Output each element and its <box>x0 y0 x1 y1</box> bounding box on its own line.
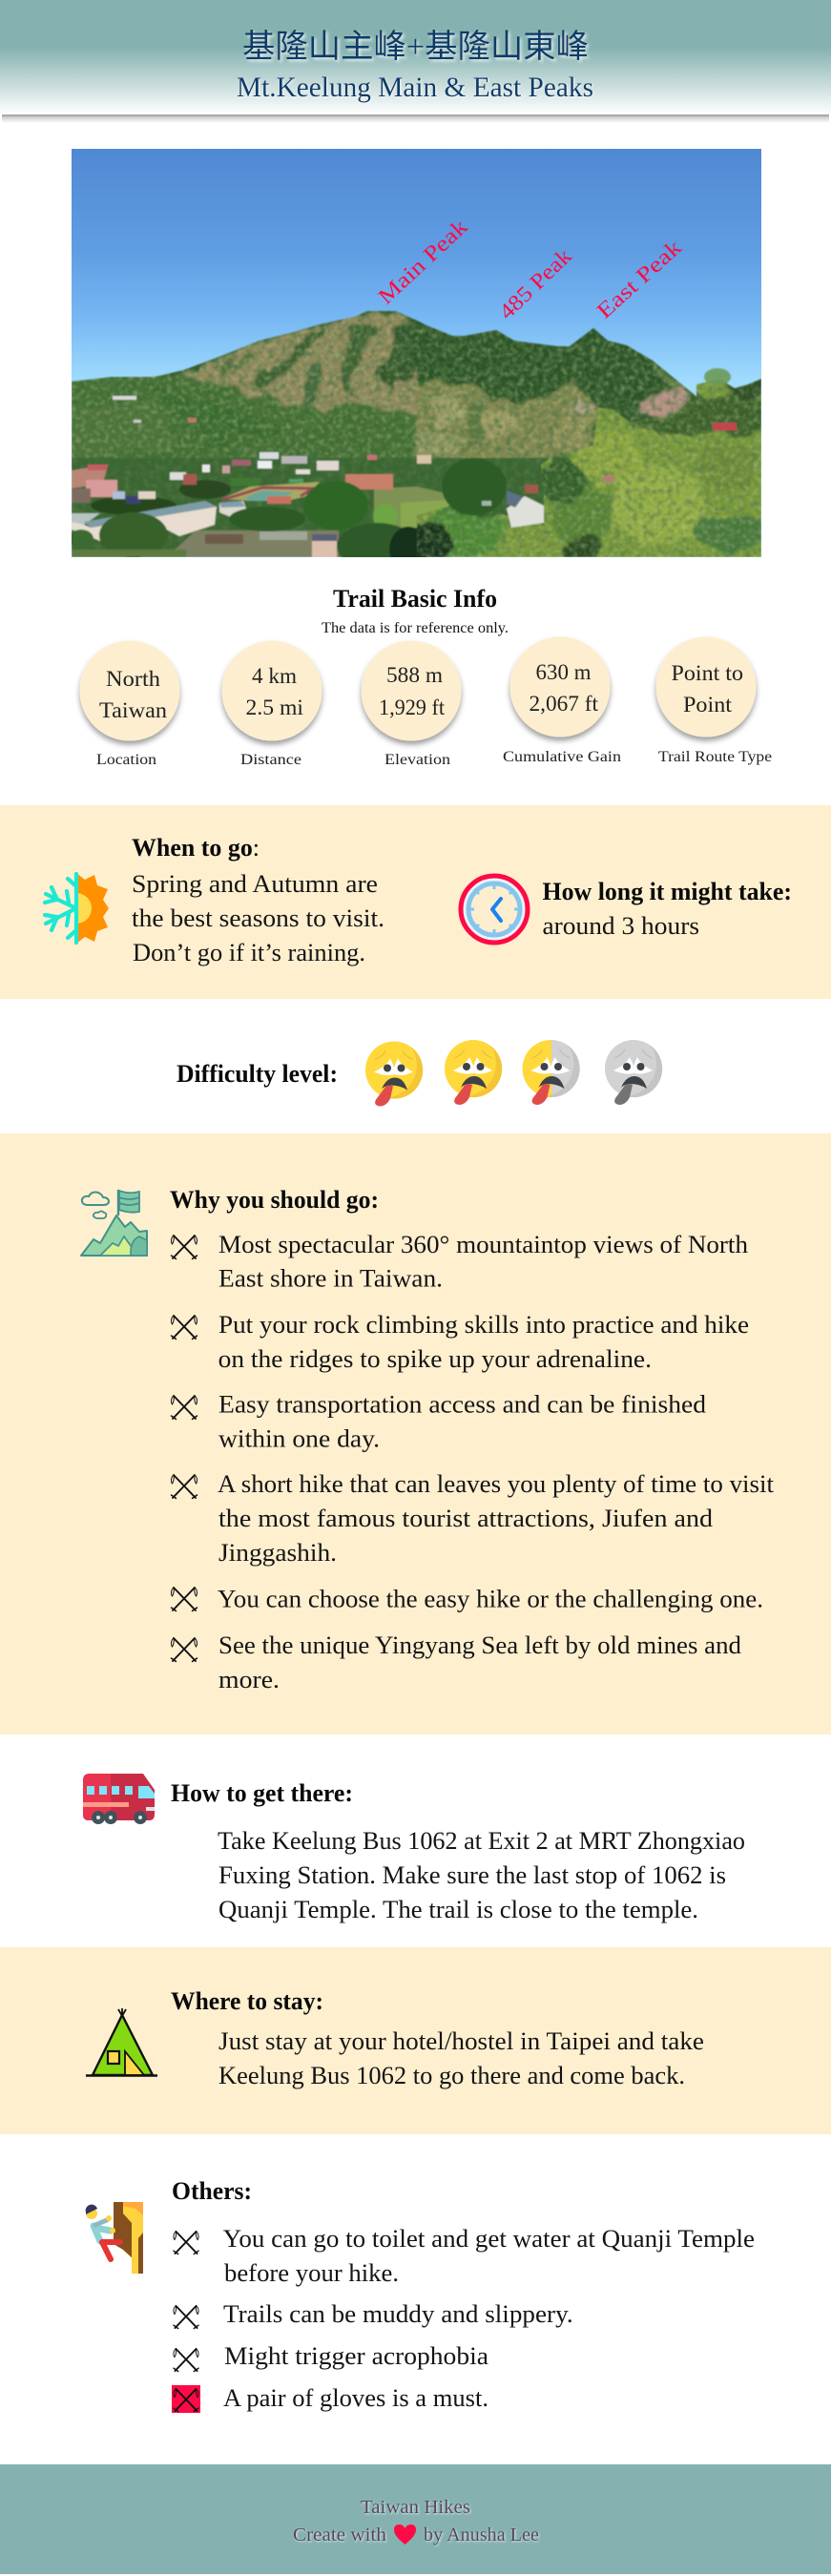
stat: elevation: 588 m <box>386 663 443 687</box>
dark tree behind house <box>442 458 507 515</box>
grass <box>374 487 458 528</box>
reason 4: Jinggashih. <box>218 1539 337 1567</box>
reason 6: more. <box>218 1666 280 1693</box>
text: bus directions: Fuxing Station. Make sure the last stop of 1062 is <box>218 1861 726 1889</box>
heading: how to get there: How to get there: <box>171 1779 353 1807</box>
panel: when to go and duration <box>0 805 831 999</box>
heading: Trail Basic Info: Trail Basic Info <box>333 585 497 613</box>
reason 4: A short hike that can leaves you plenty of time to visit <box>218 1470 775 1498</box>
stat: elevation: 1,929 ft <box>379 696 446 719</box>
icon: heart <box>394 2524 416 2545</box>
reason 5: You can choose the easy hike or the challenging one. <box>218 1586 763 1612</box>
stat: elevation: Elevation <box>384 752 450 768</box>
title: English: Mt.Keelung Main & East Peaks <box>237 72 593 103</box>
reason 1 <box>172 1231 748 1292</box>
lower trees and paths <box>167 530 339 557</box>
dark tree band <box>179 480 231 499</box>
icon: face 4 empty <box>605 1040 662 1105</box>
icon: rock climber <box>86 2202 143 2274</box>
mountain <box>72 309 761 557</box>
school building <box>72 513 100 525</box>
icon: sun and snowflake <box>45 873 109 944</box>
stat: distance: 4 km <box>252 664 297 688</box>
panel: where to stay <box>0 1947 831 2134</box>
heading: why you should go: Why you should go: <box>170 1186 379 1214</box>
stat: location: Taiwan <box>99 698 168 722</box>
upper tan slope <box>183 313 425 417</box>
stat: location: Location <box>96 752 156 768</box>
photo of Mt. Keelung with peak labels <box>57 149 773 572</box>
left lower slopes <box>72 373 418 458</box>
peak label: 485 Peak: 485 Peak <box>494 243 576 324</box>
tip 1: You can go to toilet and get water at Quanji Temple <box>223 2225 755 2253</box>
reason 1: East shore in Taiwan. <box>218 1265 443 1292</box>
tip 2: Trails can be muddy and slippery. <box>223 2300 573 2328</box>
pink rock <box>639 391 693 418</box>
stat: distance: 2.5 mi <box>246 696 303 719</box>
reason 1: Most spectacular 360° mountaintop views of North <box>218 1231 748 1258</box>
footer: credit: Create with <box>293 2524 386 2545</box>
tip 3: Might trigger acrophobia <box>224 2342 488 2370</box>
difficulty rating <box>177 1040 662 1107</box>
sports field <box>221 482 320 501</box>
section: others <box>86 2177 755 2413</box>
text: when to go: the best seasons to visit. <box>132 904 384 932</box>
right tan slope <box>417 380 598 461</box>
stat: route type: Trail Route Type <box>658 749 772 765</box>
footer <box>0 2464 831 2574</box>
stat: location: North <box>106 667 161 691</box>
icon: red bus <box>83 1774 155 1824</box>
text: stay advice: Keelung Bus 1062 to go there and come back. <box>218 2062 685 2089</box>
stat: route type <box>656 637 772 765</box>
text: stay advice: Just stay at your hotel/hostel in Taipei and take <box>218 2027 704 2055</box>
note: reference only: The data is for reference only. <box>322 620 509 636</box>
reason 4: the most famous tourist attractions, Jiufen and <box>218 1505 713 1532</box>
reason 2: Put your rock climbing skills into practice and hike <box>218 1311 749 1339</box>
icon: clock <box>461 876 528 943</box>
reason 4 <box>172 1470 775 1567</box>
info circles <box>80 637 772 768</box>
stat: elevation <box>361 641 462 768</box>
footer: credit: by Anusha Lee <box>424 2524 539 2545</box>
panel: why you should go <box>0 1133 831 1735</box>
text: how long: How long it might take: <box>542 878 792 905</box>
label: difficulty level: Difficulty level: <box>177 1060 338 1088</box>
icon: mountain with flag <box>81 1190 147 1256</box>
text: how long <box>542 878 792 940</box>
stat: location <box>80 641 179 768</box>
header banner <box>0 0 831 123</box>
peak label: East Peak: East Peak <box>592 235 687 323</box>
text: when to go: Spring and Autumn are <box>132 870 378 898</box>
text: bus directions: Take Keelung Bus 1062 at Exit 2 at MRT Zhongxiao <box>218 1827 745 1855</box>
footer: credit <box>293 2524 539 2545</box>
icon: tent <box>86 2008 157 2076</box>
white house <box>507 496 544 528</box>
tip 4 highlighted: A pair of gloves is a must. <box>223 2384 488 2412</box>
stat: cumulative gain <box>503 637 621 765</box>
text: when to go <box>132 834 384 966</box>
text: how long: around 3 hours <box>542 912 699 940</box>
reason 6 <box>172 1631 741 1693</box>
tip 1: before your hike. <box>224 2259 399 2287</box>
reason 3: Easy transportation access and can be finished <box>218 1391 706 1418</box>
peak label: Main Peak: Main Peak <box>373 214 472 309</box>
reason 3: within one day. <box>218 1425 380 1452</box>
village ground <box>72 458 549 557</box>
stat: route type: Point to <box>672 661 743 685</box>
reason 2 <box>172 1311 749 1373</box>
stat: cumulative gain: 2,067 ft <box>529 692 599 716</box>
stat: cumulative gain: 630 m <box>536 660 592 684</box>
reason 2: on the ridges to spike up your adrenaline. <box>218 1345 652 1373</box>
stat: cumulative gain: Cumulative Gain <box>503 749 621 765</box>
stat: distance: Distance <box>240 752 301 768</box>
icon: face 3 half filled <box>523 1040 580 1105</box>
text: bus directions <box>218 1827 745 1923</box>
foreground tree mass <box>416 378 761 557</box>
heading: others: Others: <box>172 2177 252 2205</box>
title: Chinese: 基隆山主峰+基隆山東峰 <box>242 29 589 65</box>
tip 1 <box>174 2225 755 2287</box>
heading: where to stay: Where to stay: <box>171 1987 323 2015</box>
text: stay advice <box>218 2027 704 2089</box>
section: how to get there <box>83 1774 745 1923</box>
reason 3 <box>172 1391 706 1452</box>
footer: brand: Taiwan Hikes <box>361 2497 470 2518</box>
icon: face 1 filled <box>365 1042 423 1107</box>
stat: distance <box>221 641 322 768</box>
stat: route type: Point <box>683 693 733 717</box>
texture <box>73 311 691 458</box>
icon: face 2 filled <box>445 1040 502 1105</box>
reason 6: See the unique Yingyang Sea left by old mines and <box>218 1631 741 1659</box>
houses <box>72 465 108 488</box>
text: bus directions: Quanji Temple. The trail is close to the temple. <box>218 1896 698 1923</box>
text: when to go: When to go: <box>132 834 260 862</box>
right dark ridge <box>417 320 687 410</box>
text: when to go: Don’t go if it’s raining. <box>133 939 365 966</box>
